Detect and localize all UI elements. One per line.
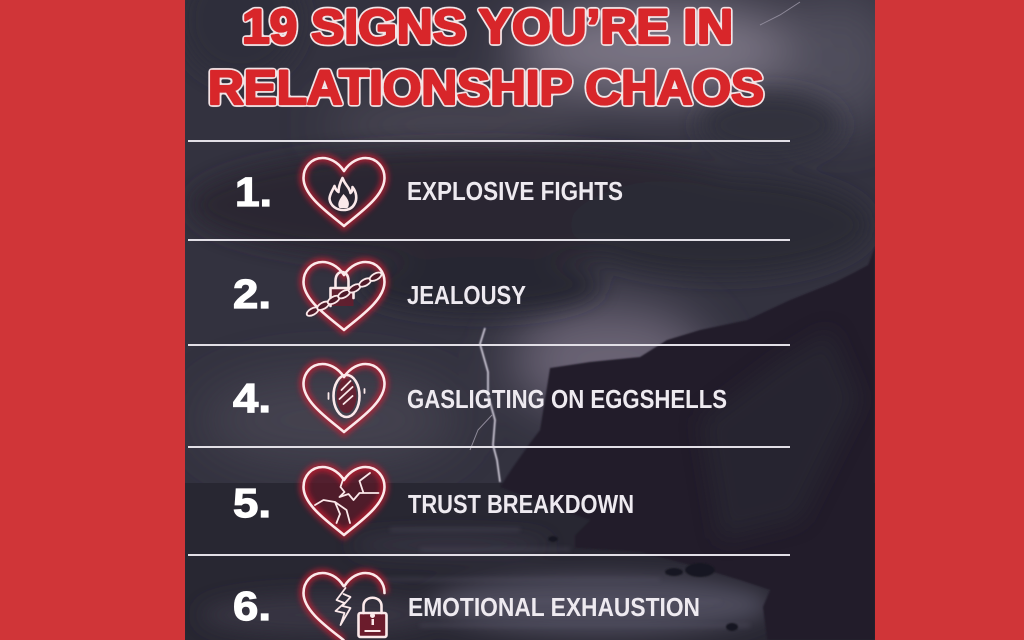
title: 19 SIGNS YOU’RE IN (242, 1, 733, 54)
icon: heart with padlock and chain (304, 262, 384, 330)
sea streaks (386, 528, 568, 626)
number 2: 2. (233, 271, 271, 317)
item 4: gaslighting (233, 364, 727, 432)
shore rocks (548, 536, 738, 631)
label: EMOTIONAL EXHAUSTION (408, 592, 700, 622)
label: EXPLOSIVE FIGHTS (407, 176, 623, 206)
icon: heart with mirror (304, 364, 384, 432)
number 6: 6. (233, 583, 271, 629)
light sky glow (200, 0, 900, 465)
icon: heart with flame (304, 158, 384, 226)
item 6: emotional exhaustion (233, 573, 700, 640)
item 5: trust breakdown (233, 467, 634, 535)
horizon and sea (185, 483, 769, 640)
number 1: 1. (235, 169, 272, 215)
title (208, 1, 764, 115)
label: TRUST BREAKDOWN (408, 489, 634, 519)
title: RELATIONSHIP CHAOS (208, 62, 764, 115)
number 5: 5. (233, 480, 271, 526)
number 4: 4. (233, 375, 271, 421)
dark storm cloud (194, 84, 860, 318)
icon: cracked heart (304, 467, 384, 535)
item 1: explosive fights (235, 158, 623, 226)
label: GASLIGTING ON EGGSHELLS (407, 384, 727, 414)
lightning bolt (480, 328, 500, 482)
divider rules (188, 141, 790, 555)
storm background photo (180, 0, 900, 640)
cliff (500, 247, 875, 640)
item 2: jealousy (233, 262, 526, 330)
icon: broken heart with padlock (304, 573, 386, 640)
label: JEALOUSY (407, 280, 526, 310)
